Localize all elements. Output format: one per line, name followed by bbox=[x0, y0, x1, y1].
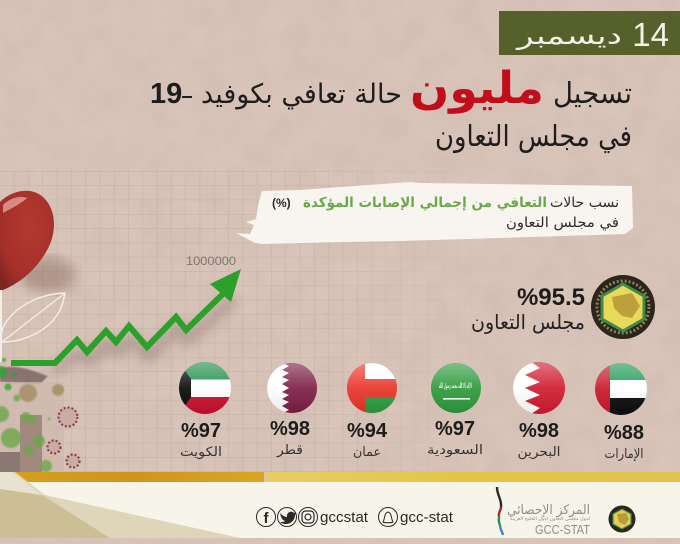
icon: facebook: f bbox=[264, 510, 270, 527]
country: Kuwait: %97 bbox=[181, 420, 221, 442]
country: Oman: %94 bbox=[347, 420, 388, 442]
country: UAE: الإمارات bbox=[604, 447, 644, 462]
social media handles bbox=[256, 508, 453, 527]
icon: snapchat bbox=[378, 508, 398, 526]
date banner: 14 bbox=[632, 16, 669, 53]
country: Bahrain: %98 bbox=[519, 420, 559, 442]
icon: instagram bbox=[298, 508, 318, 526]
callout: white torn strip: في مجلس التعاون bbox=[506, 215, 619, 231]
logo: GCC-STAT: لدول مجلس التعاون لدول الخليج العربية bbox=[510, 517, 590, 522]
country: UAE: %88 bbox=[604, 422, 644, 444]
flag: Kuwait bbox=[179, 362, 231, 414]
icon: twitter bbox=[278, 508, 296, 526]
country: Bahrain bbox=[513, 362, 565, 460]
country: Kuwait: الكويت bbox=[180, 445, 222, 460]
flag: UAE bbox=[595, 363, 647, 415]
GCC total bbox=[471, 275, 655, 339]
text: لا إله إلا الله محمد رسول الله bbox=[439, 382, 472, 390]
illustration: jar with virus particles bbox=[0, 358, 80, 472]
callout: white torn strip bbox=[236, 182, 633, 244]
country: Saudi Arabia: %97 bbox=[435, 418, 475, 440]
logo: GCC-STAT bbox=[497, 487, 590, 537]
GCC total: مجلس التعاون bbox=[471, 310, 585, 334]
icon: facebook bbox=[256, 508, 276, 527]
country: Bahrain: البحرين bbox=[518, 445, 560, 460]
footer band bbox=[0, 472, 680, 538]
title: 19 bbox=[150, 78, 182, 110]
flag: Bahrain bbox=[513, 362, 565, 414]
line chart: rising green arrow bbox=[11, 256, 241, 372]
country: Oman bbox=[347, 363, 397, 460]
country: Saudi Arabia: السعودية bbox=[427, 443, 483, 458]
callout: white torn strip: نسب حالات bbox=[550, 195, 619, 211]
callout: white torn strip: التعافي من إجمالي الإصابات المؤكدة bbox=[303, 195, 547, 211]
country: Qatar: قطر bbox=[276, 443, 303, 458]
title: تسجيل bbox=[553, 76, 632, 110]
icon: ribbon bbox=[497, 487, 503, 535]
flag: Oman bbox=[347, 363, 397, 413]
date banner bbox=[499, 11, 680, 55]
GCC total: %95.5 bbox=[517, 284, 585, 311]
country: UAE bbox=[595, 363, 647, 462]
icon: GCC emblem small bbox=[608, 506, 636, 532]
flag: Qatar bbox=[267, 363, 317, 413]
callout: white torn strip: (%) bbox=[272, 196, 291, 210]
illustration: white leaf outline bbox=[1, 290, 65, 362]
country: Qatar bbox=[267, 363, 317, 458]
chart label: 1000000 bbox=[186, 256, 236, 268]
logo: GCC-STAT: المركز الإحصائي bbox=[507, 503, 590, 518]
illustration: red apple bbox=[0, 191, 76, 293]
country: Saudi Arabia bbox=[427, 363, 483, 458]
icon: GCC emblem bbox=[591, 275, 655, 339]
social media handles: gcc-stat bbox=[400, 510, 453, 526]
title: في مجلس التعاون bbox=[435, 119, 632, 154]
title bbox=[150, 63, 632, 154]
country: Qatar: %98 bbox=[270, 418, 310, 440]
title: مليون bbox=[410, 63, 544, 114]
logo: GCC-STAT: GCC-STAT bbox=[535, 522, 590, 537]
country: Kuwait bbox=[179, 362, 231, 460]
country: Oman: عمان bbox=[353, 445, 381, 460]
background: paper texture bbox=[0, 170, 444, 472]
date banner: ديسمبر bbox=[516, 22, 622, 50]
title: حالة تعافي بكوفيد bbox=[201, 79, 402, 110]
social media handles: gccstat bbox=[320, 510, 368, 526]
